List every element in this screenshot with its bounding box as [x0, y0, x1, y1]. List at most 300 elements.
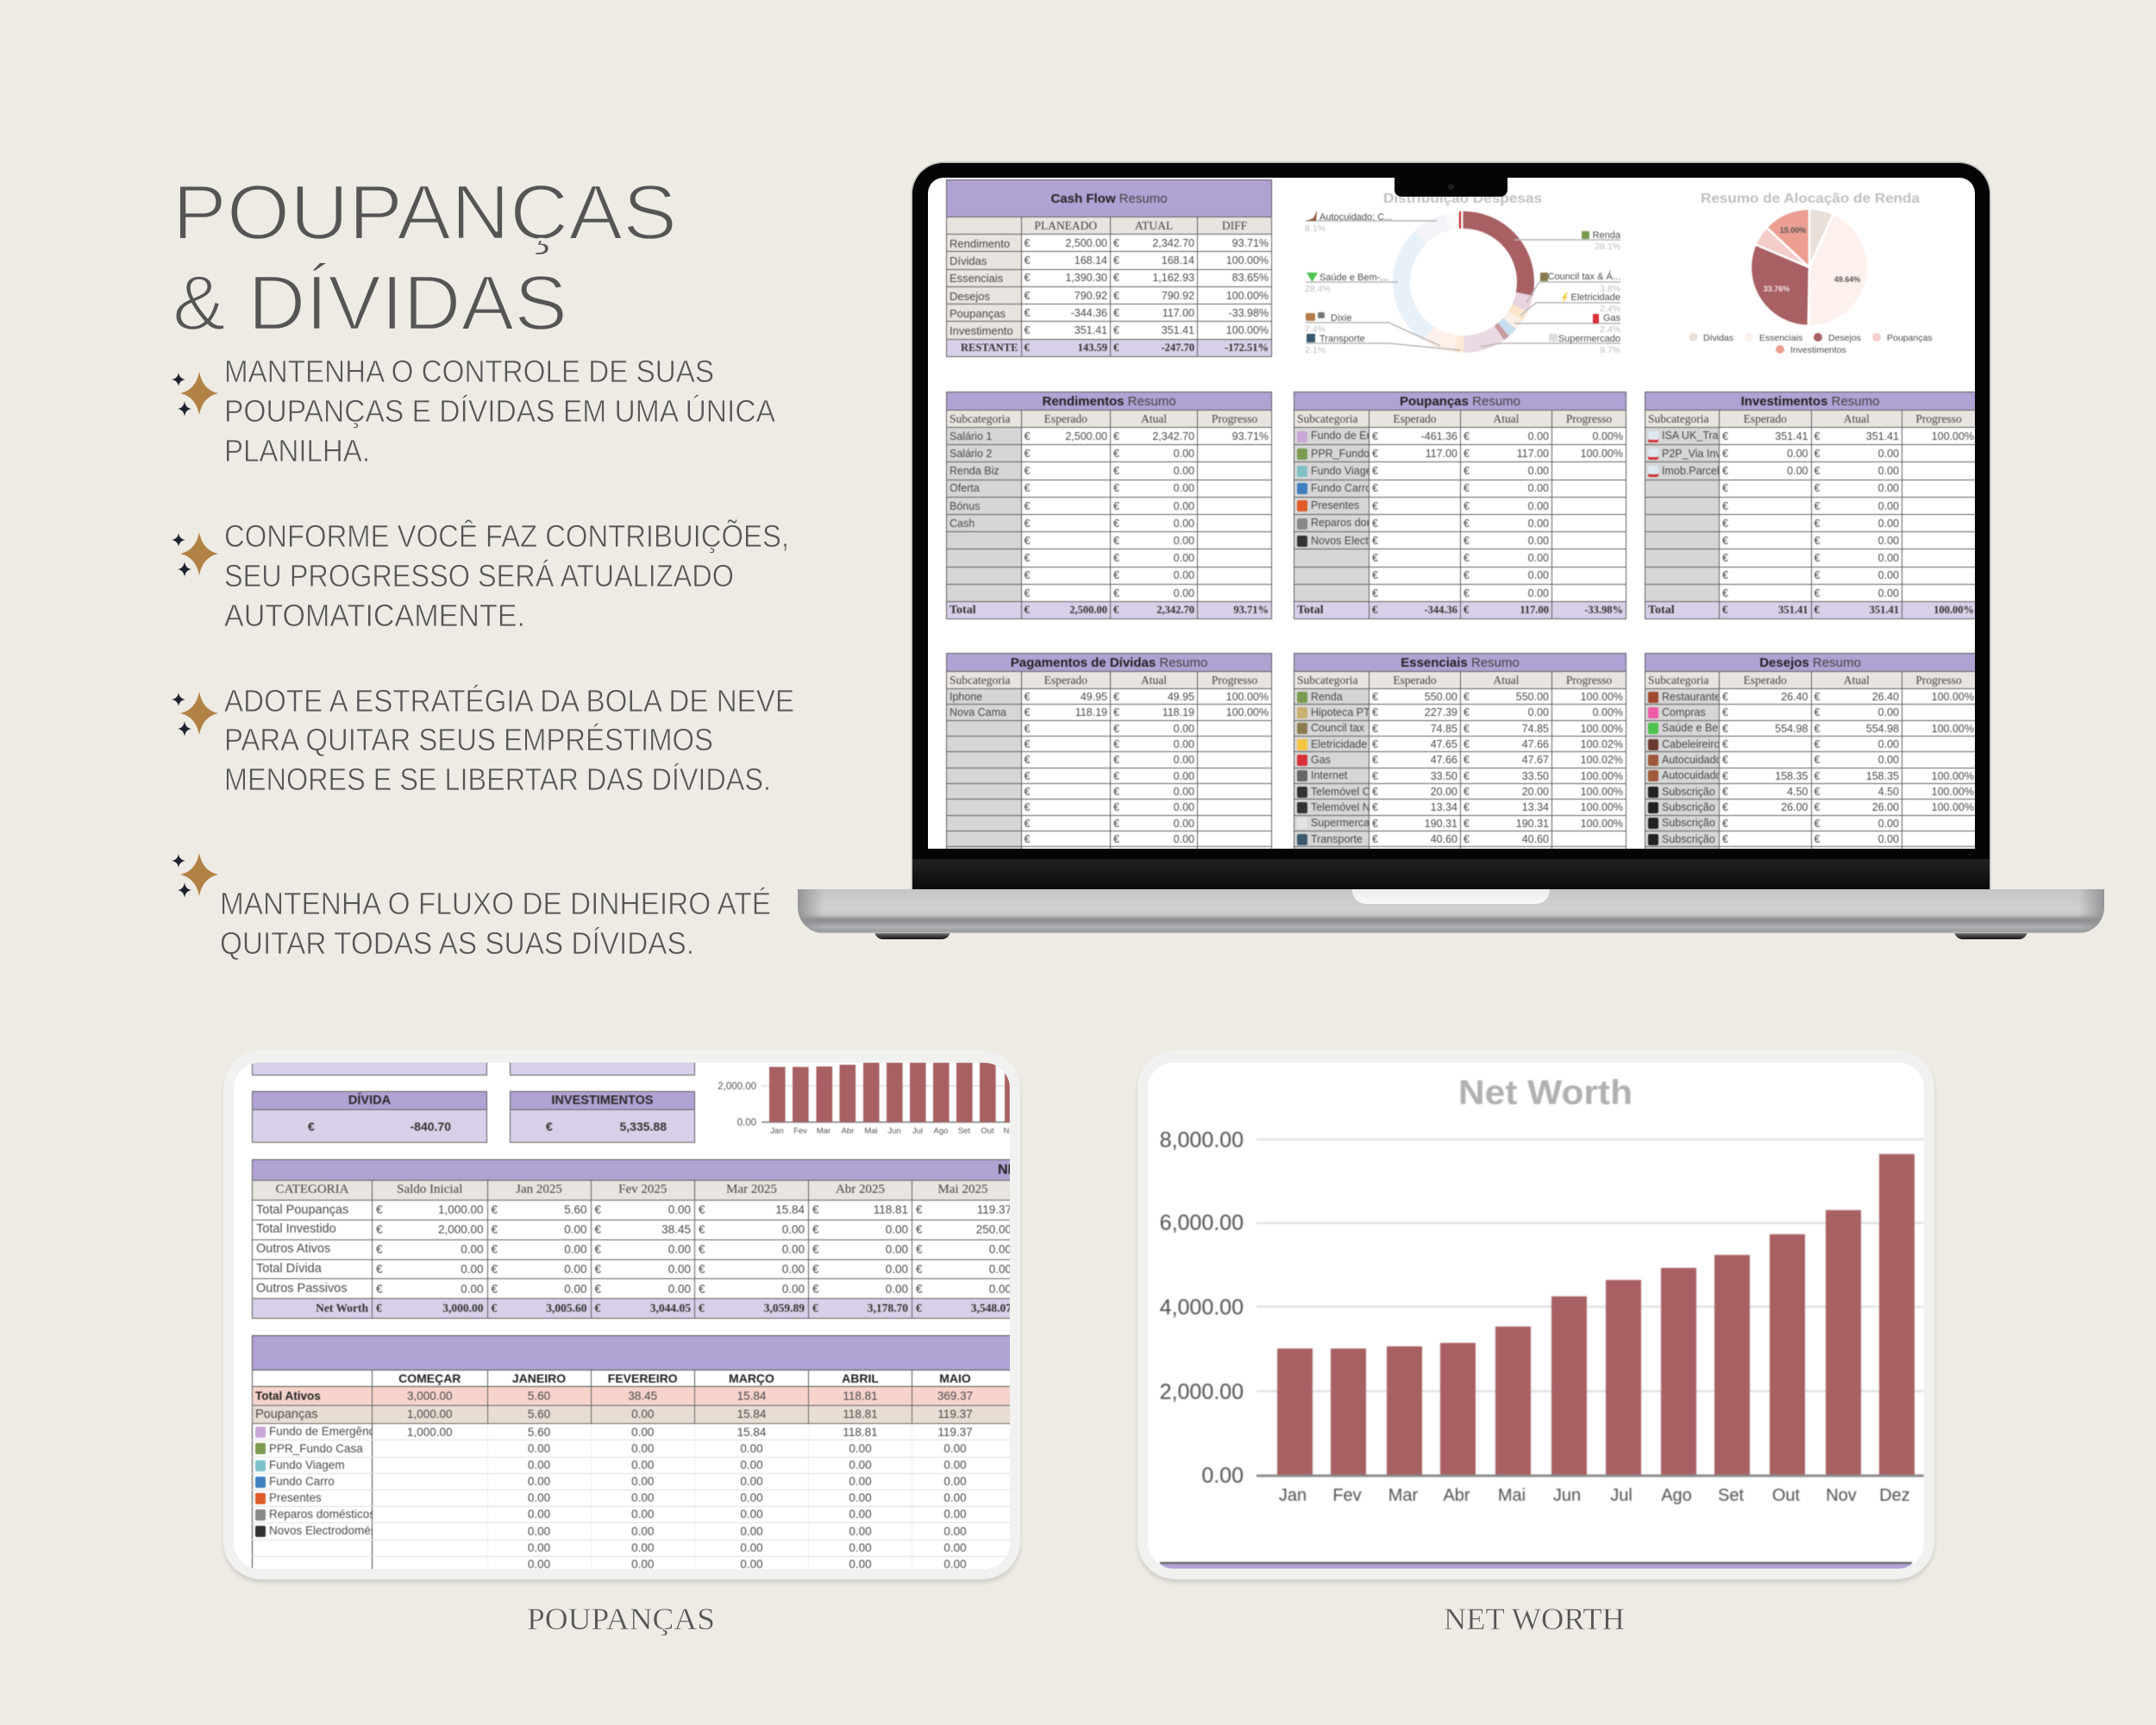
- heading: Poupanças Resumo: 0.00: [1528, 569, 1549, 581]
- heading: Rendimentos Resumo: €: [1113, 482, 1119, 494]
- heading band: 0.00: [528, 1442, 550, 1455]
- heading: Essenciais Resumo: [1294, 654, 1626, 849]
- heading: Desejos Resumo: 100.00%: [1932, 691, 1974, 703]
- heading: Essenciais Resumo: Gas: [1311, 754, 1331, 766]
- heading: Rendimentos Resumo: €: [1025, 448, 1030, 460]
- heading: Investimentos Resumo: €: [1722, 587, 1728, 599]
- heading: Desejos Resumo: 0.00: [1878, 818, 1899, 830]
- heading: Desejos Resumo: €: [1814, 801, 1820, 813]
- heading: Investimentos Resumo: Total: [1648, 604, 1675, 617]
- heading: Essenciais Resumo: 100.02%: [1581, 754, 1623, 766]
- text block: bullet 2: SEU PROGRESSO SERÁ ATUALIZADO: [224, 558, 734, 593]
- heading: Essenciais Resumo: 13.34: [1431, 801, 1457, 813]
- heading: Rendimentos Resumo: Atual: [1141, 412, 1167, 424]
- heading: Rendimentos Resumo: €: [1113, 587, 1119, 599]
- heading: Rendimentos Resumo: €: [1113, 535, 1119, 547]
- heading band: [252, 1335, 1028, 1572]
- heading: Pagamentos de Dívidas Resumo: €: [1113, 706, 1119, 718]
- heading: Net Worth: 5.60: [564, 1203, 586, 1216]
- heading: Net Worth: €: [595, 1223, 601, 1236]
- heading: Net Worth: Mai 2025: [938, 1182, 987, 1196]
- heading: Pagamentos de Dívidas Resumo: €: [1113, 833, 1119, 845]
- heading: Rendimentos Resumo: Subcategoria: [950, 412, 1010, 424]
- heading: Essenciais Resumo: Telemóvel N: [1311, 801, 1369, 813]
- heading: Essenciais Resumo: €: [1463, 754, 1470, 766]
- heading: Net Worth: €: [699, 1302, 705, 1314]
- heading band: 0.00: [528, 1475, 550, 1488]
- summary box: Investimentos: €: [546, 1120, 553, 1133]
- heading: Essenciais Resumo: 100.00%: [1581, 818, 1623, 830]
- heading: Essenciais Resumo: 20.00: [1431, 786, 1457, 798]
- laptop notch: [1395, 178, 1507, 197]
- heading: Investimentos Resumo: 0.00: [1878, 482, 1899, 494]
- table: Investimentos summary: [1644, 391, 1975, 620]
- heading band: 119.37: [937, 1426, 973, 1439]
- chart: Distribuição Despesas donut: Distribuição Despesas: [1383, 191, 1542, 206]
- heading: Poupanças Resumo: Poupanças Resumo: [1400, 393, 1520, 409]
- heading: Cash Flow Resumo: €: [1025, 254, 1030, 267]
- heading: Net Worth: €: [595, 1243, 601, 1256]
- heading: Rendimentos Resumo: €: [1025, 465, 1030, 477]
- heading: Investimentos Resumo: 0.00: [1787, 448, 1808, 460]
- summary box: Investimentos: INVESTIMENTOS: [551, 1094, 654, 1107]
- text block: bullet 2: AUTOMATICAMENTE.: [224, 598, 525, 633]
- heading: Desejos Resumo: €: [1722, 706, 1728, 718]
- heading: Investimentos Resumo: €: [1722, 604, 1727, 616]
- heading: Essenciais Resumo: 47.66: [1431, 754, 1457, 766]
- table: Essenciais summary: [1293, 652, 1627, 849]
- heading: Desejos Resumo: €: [1722, 818, 1728, 830]
- table: Desejos summary: [1644, 652, 1975, 849]
- heading band: 0.00: [631, 1541, 654, 1554]
- chart: cropped net worth bars: 0.00: [737, 1118, 756, 1128]
- heading: Essenciais Resumo: €: [1372, 833, 1378, 845]
- heading: Rendimentos Resumo: 0.00: [1174, 535, 1194, 547]
- heading: Investimentos Resumo: 0.00: [1878, 535, 1899, 547]
- heading: Pagamentos de Dívidas Resumo: 0.00: [1174, 801, 1194, 813]
- heading band: MARÇO: [729, 1371, 774, 1385]
- heading: Investimentos Resumo: 100.00%: [1934, 604, 1974, 616]
- heading: Essenciais Resumo: €: [1463, 818, 1470, 830]
- heading: Desejos Resumo: €: [1814, 818, 1820, 830]
- heading: Cash Flow Resumo: Investimento: [950, 324, 1013, 337]
- heading: Net Worth: €: [492, 1263, 498, 1276]
- text block: bullet 1: POUPANÇAS E DÍVIDAS EM UMA ÚNICA: [224, 393, 775, 429]
- heading: Cash Flow Resumo: €: [1113, 324, 1119, 336]
- chart: Distribuição Despesas donut: 8.1%: [1305, 223, 1326, 234]
- heading: Cash Flow Resumo: Cash Flow Resumo: [1050, 191, 1168, 205]
- heading band: Presentes: [269, 1491, 322, 1504]
- heading: Net Worth: 0.00: [461, 1243, 483, 1256]
- heading: Net Worth: €: [916, 1283, 923, 1295]
- heading: Net Worth: Abr 2025: [836, 1182, 885, 1196]
- heading: Net Worth: Saldo Inicial: [397, 1182, 462, 1196]
- heading: Rendimentos Resumo: 0.00: [1174, 500, 1194, 512]
- chart: Net Worth bars: 6,000.00: [1160, 1211, 1244, 1235]
- heading: Essenciais Resumo: 0.00%: [1593, 706, 1623, 718]
- summary box: Dívida: -840.70: [411, 1120, 451, 1133]
- heading: Pagamentos de Dívidas Resumo: €: [1025, 723, 1030, 735]
- heading: Net Worth: [252, 1159, 1010, 1318]
- table: monthly savings: [251, 1334, 1010, 1569]
- heading: Rendimentos Resumo: €: [1025, 518, 1030, 530]
- heading: Essenciais Resumo: 100.00%: [1581, 723, 1623, 735]
- heading: Investimentos Resumo: €: [1814, 587, 1820, 599]
- heading: Pagamentos de Dívidas Resumo: €: [1113, 818, 1119, 830]
- heading: Poupanças Resumo: €: [1372, 482, 1378, 494]
- heading: Rendimentos Resumo: €: [1025, 430, 1030, 442]
- heading: Net Worth: €: [812, 1243, 819, 1256]
- heading: Pagamentos de Dívidas Resumo: €: [1113, 786, 1119, 798]
- heading: Cash Flow Resumo: 790.92: [1162, 290, 1194, 302]
- heading: Cash Flow Resumo: PLANEADO: [1034, 219, 1097, 231]
- laptop feet: [874, 933, 2027, 939]
- heading: Cash Flow Resumo: -247.70: [1161, 342, 1194, 354]
- heading: Investimentos Resumo: 351.41: [1866, 430, 1899, 442]
- heading: Investimentos Resumo: €: [1722, 518, 1728, 530]
- heading: Net Worth: €: [376, 1243, 383, 1256]
- heading: Cash Flow Resumo: Dívidas: [950, 254, 987, 267]
- heading: Net Worth: €: [699, 1243, 705, 1256]
- text block: bullet 1: PLANILHA.: [224, 433, 370, 468]
- heading: Rendimentos Resumo: 0.00: [1174, 518, 1194, 530]
- heading: Essenciais Resumo: 74.85: [1522, 723, 1549, 735]
- heading band: JANEIRO: [512, 1371, 566, 1385]
- heading: Essenciais Resumo: Essenciais Resumo: [1401, 656, 1520, 669]
- heading: Cash Flow Resumo: Rendimento: [950, 237, 1010, 250]
- heading: Desejos Resumo: Desejos Resumo: [1759, 656, 1861, 669]
- heading: Desejos Resumo: Subscrição: [1662, 833, 1715, 845]
- heading: Investimentos Resumo: €: [1814, 465, 1820, 477]
- heading band: 15.84: [737, 1389, 766, 1402]
- chart: Distribuição Despesas donut: Council tax & Á...: [1548, 271, 1620, 282]
- chart: Resumo de Alocação de Renda pie: Desejos: [1828, 333, 1861, 343]
- heading: Essenciais Resumo: Atual: [1494, 673, 1520, 687]
- heading: Desejos Resumo: 0.00: [1878, 706, 1899, 718]
- heading: Investimentos Resumo: 0.00: [1878, 465, 1899, 477]
- heading: Essenciais Resumo: 100.02%: [1581, 738, 1623, 750]
- heading: Cash Flow Resumo: Desejos: [950, 290, 990, 303]
- heading: Net Worth: Outros Passivos: [256, 1282, 348, 1295]
- heading: Rendimentos Resumo: Progresso: [1212, 412, 1257, 424]
- table: net worth by month: [251, 1158, 1010, 1320]
- heading: Investimentos Resumo: €: [1814, 500, 1820, 512]
- heading: Rendimentos Resumo: Renda Biz: [950, 465, 1000, 477]
- heading: Investimentos Resumo: 0.00: [1878, 518, 1899, 530]
- heading: Cash Flow Resumo: €: [1113, 290, 1119, 302]
- heading: Pagamentos de Dívidas Resumo: Pagamentos de Dívidas Resumo: [1011, 656, 1207, 669]
- heading: Pagamentos de Dívidas Resumo: 0.00: [1174, 770, 1194, 782]
- heading: Essenciais Resumo: Eletricidade: [1311, 738, 1367, 750]
- heading: Cash Flow Resumo: €: [1025, 237, 1030, 249]
- heading: Investimentos Resumo: Investimentos Resumo: [1741, 393, 1879, 409]
- heading: Rendimentos Resumo: Salário 1: [950, 430, 992, 442]
- heading: Desejos Resumo: Cabeleireiro: [1662, 738, 1720, 750]
- heading: Poupanças Resumo: €: [1372, 535, 1378, 547]
- heading: Essenciais Resumo: €: [1463, 801, 1470, 813]
- heading: Essenciais Resumo: €: [1372, 786, 1378, 798]
- chart: Resumo de Alocação de Renda pie: 49.64%: [1834, 275, 1860, 284]
- heading: Poupanças Resumo: €: [1463, 604, 1469, 616]
- heading: Poupanças Resumo: 0.00: [1528, 430, 1549, 442]
- heading: Rendimentos Resumo: €: [1025, 569, 1030, 581]
- heading: Essenciais Resumo: Esperado: [1393, 673, 1437, 687]
- heading: Essenciais Resumo: €: [1463, 786, 1470, 798]
- heading: Net Worth: €: [492, 1203, 498, 1216]
- trackpad notch: [1352, 889, 1550, 904]
- heading: Poupanças Resumo: €: [1372, 552, 1378, 564]
- heading: Cash Flow Resumo: 83.65%: [1232, 272, 1269, 284]
- heading: Investimentos Resumo: €: [1814, 552, 1820, 564]
- heading: Cash Flow Resumo: Poupanças: [950, 307, 1006, 320]
- heading: Desejos Resumo: €: [1814, 723, 1820, 735]
- heading: Poupanças Resumo: €: [1463, 448, 1470, 460]
- heading: Cash Flow Resumo: -172.51%: [1225, 342, 1269, 354]
- heading: Essenciais Resumo: Council tax: [1311, 722, 1364, 734]
- heading: Desejos Resumo: €: [1722, 738, 1728, 750]
- heading: Pagamentos de Dívidas Resumo: €: [1113, 754, 1119, 766]
- heading: Desejos Resumo: €: [1722, 691, 1728, 703]
- heading: Poupanças Resumo: -344.36: [1424, 604, 1457, 616]
- heading: Essenciais Resumo: 190.31: [1425, 818, 1457, 830]
- heading: Net Worth: 3,178.70: [868, 1302, 908, 1314]
- laptop base: [798, 889, 2104, 933]
- heading band: 15.84: [737, 1408, 766, 1421]
- heading band: 0.00: [943, 1491, 967, 1504]
- heading: Net Worth: €: [376, 1203, 383, 1216]
- heading: Desejos Resumo: 26.40: [1872, 691, 1899, 703]
- table: Poupanças summary: [1293, 391, 1627, 620]
- heading: Desejos Resumo: €: [1814, 691, 1820, 703]
- heading: Cash Flow Resumo: ATUAL: [1135, 219, 1173, 231]
- chart: Net Worth bars: 4,000.00: [1160, 1295, 1244, 1320]
- heading: Poupanças Resumo: €: [1372, 569, 1378, 581]
- heading: Poupanças Resumo: [1294, 392, 1626, 619]
- heading: Cash Flow Resumo: €: [1113, 237, 1119, 249]
- heading band: Reparos domésticos: [269, 1508, 373, 1521]
- chart: cropped net worth bars: Abr: [842, 1126, 854, 1136]
- heading: Cash Flow Resumo: 2,342.70: [1152, 237, 1194, 249]
- heading: Pagamentos de Dívidas Resumo: 0.00: [1174, 754, 1194, 766]
- heading: Essenciais Resumo: 100.00%: [1581, 770, 1623, 782]
- heading: Essenciais Resumo: Telemóvel C: [1311, 786, 1369, 798]
- heading: Pagamentos de Dívidas Resumo: 100.00%: [1226, 691, 1269, 703]
- heading: Essenciais Resumo: €: [1463, 723, 1470, 735]
- heading: Desejos Resumo: €: [1722, 770, 1728, 782]
- heading: Desejos Resumo: Subcategoria: [1648, 673, 1708, 687]
- chart: Distribuição Despesas donut: 28.1%: [1595, 242, 1620, 252]
- heading: Net Worth: Total Poupanças: [256, 1203, 348, 1217]
- heading: Net Worth: 1,000.00: [438, 1203, 483, 1216]
- heading: Cash Flow Resumo: 100.00%: [1226, 290, 1269, 302]
- heading band: MAIO: [939, 1371, 971, 1385]
- heading: Poupanças Resumo: Subcategoria: [1297, 412, 1357, 424]
- heading: Pagamentos de Dívidas Resumo: €: [1025, 833, 1030, 845]
- heading: Net Worth: Outros Ativos: [256, 1242, 330, 1256]
- chart: Distribuição Despesas donut: Renda: [1593, 230, 1621, 241]
- text block: bullet 1: [224, 354, 775, 468]
- heading: Pagamentos de Dívidas Resumo: 0.00: [1174, 723, 1194, 735]
- heading: Investimentos Resumo: 0.00: [1878, 500, 1899, 512]
- heading: Essenciais Resumo: €: [1372, 770, 1378, 782]
- heading: Net Worth: €: [699, 1223, 705, 1236]
- chart: Distribuição Despesas donut: Supermercado: [1558, 334, 1620, 344]
- heading: Rendimentos Resumo: €: [1025, 587, 1030, 599]
- heading band: 0.00: [849, 1541, 872, 1554]
- heading: Cash Flow Resumo: DIFF: [1222, 219, 1247, 231]
- heading: Investimentos Resumo: €: [1722, 569, 1728, 581]
- heading band: 15.84: [737, 1426, 766, 1439]
- chart: cropped net worth bars: Fev: [793, 1126, 807, 1136]
- heading: Desejos Resumo: €: [1722, 833, 1728, 845]
- heading: Essenciais Resumo: Subcategoria: [1297, 673, 1357, 687]
- heading: Investimentos Resumo: €: [1814, 518, 1820, 530]
- chart: Distribuição Despesas donut: Autocuidado: C...: [1319, 212, 1392, 223]
- heading: Rendimentos Resumo: €: [1113, 569, 1119, 581]
- heading: Poupanças Resumo: -33.98%: [1584, 604, 1623, 616]
- heading: Essenciais Resumo: 0.00: [1528, 706, 1549, 718]
- heading: Poupanças Resumo: 0.00: [1528, 500, 1549, 512]
- heading band: 118.81: [843, 1426, 878, 1439]
- heading: Poupanças Resumo: €: [1463, 482, 1470, 494]
- heading: Desejos Resumo: 26.00: [1872, 801, 1899, 813]
- heading band: 0.00: [740, 1442, 763, 1455]
- heading: Poupanças Resumo: 0.00: [1528, 482, 1549, 494]
- chart: cropped net worth bars: Jul: [912, 1126, 923, 1136]
- heading: Poupanças Resumo: 0.00: [1528, 535, 1549, 547]
- heading: Essenciais Resumo: €: [1372, 691, 1378, 703]
- heading: Investimentos Resumo: 0.00: [1787, 465, 1808, 477]
- chart: Resumo de Alocação de Renda pie: 15.00%: [1780, 226, 1806, 235]
- heading: Net Worth: 2,000.00: [438, 1223, 483, 1236]
- heading: Net Worth: 3,044.05: [650, 1302, 691, 1314]
- heading: Poupanças Resumo: €: [1463, 465, 1470, 477]
- heading band: 0.00: [849, 1525, 872, 1538]
- heading: Cash Flow Resumo: €: [1025, 290, 1030, 302]
- heading: Pagamentos de Dívidas Resumo: €: [1025, 770, 1030, 782]
- heading: Net Worth: €: [376, 1223, 383, 1236]
- heading band: 0.00: [631, 1475, 654, 1488]
- heading: Investimentos Resumo: [1645, 392, 1975, 619]
- heading: Poupanças Resumo: Atual: [1494, 412, 1520, 424]
- heading: Essenciais Resumo: 100.00%: [1581, 691, 1623, 703]
- heading: Desejos Resumo: 554.98: [1866, 723, 1899, 735]
- heading: Rendimentos Resumo: 0.00: [1174, 482, 1194, 494]
- heading: Poupanças Resumo: €: [1372, 587, 1378, 599]
- chart: Net Worth bars: 0.00: [1201, 1464, 1244, 1488]
- heading: Poupanças Resumo: €: [1463, 569, 1470, 581]
- icon: sparkles bullet 2: [172, 532, 218, 577]
- heading: Desejos Resumo: Progresso: [1915, 673, 1962, 687]
- heading: Net Worth: €: [916, 1263, 923, 1276]
- chart: Net Worth bars: Jul: [1610, 1486, 1633, 1505]
- laptop: [798, 162, 2104, 939]
- heading: Cash Flow Resumo: €: [1025, 307, 1030, 319]
- heading: Cash Flow Resumo: 351.41: [1162, 324, 1194, 336]
- heading band: 118.81: [843, 1389, 878, 1402]
- heading band: FEVEREIRO: [608, 1371, 678, 1385]
- heading: Net Worth: €: [492, 1223, 498, 1236]
- heading band: 0.00: [740, 1475, 763, 1488]
- heading: Essenciais Resumo: €: [1463, 691, 1470, 703]
- heading: Rendimentos Resumo: Total: [950, 604, 976, 617]
- heading: Desejos Resumo: 0.00: [1878, 754, 1899, 766]
- heading: Net Worth: 0.00: [886, 1263, 908, 1276]
- text block: bullet 4: QUITAR TODAS AS SUAS DÍVIDAS.: [220, 925, 694, 961]
- caption: Poupanças: POUPANÇAS: [527, 1602, 715, 1636]
- heading: Net Worth: 0.00: [782, 1263, 805, 1276]
- heading: Essenciais Resumo: €: [1372, 723, 1378, 735]
- heading band: 0.00: [528, 1508, 550, 1521]
- chart: cropped net worth bars: [718, 1063, 1010, 1136]
- heading band: Poupanças: [255, 1408, 318, 1421]
- heading: Poupanças Resumo: 117.00: [1517, 448, 1549, 460]
- text block: bullet 4: MANTENHA O FLUXO DE DINHEIRO ATÉ: [220, 886, 771, 921]
- heading band: 0.00: [631, 1442, 654, 1455]
- chart: Net Worth bars: Fev: [1332, 1486, 1362, 1505]
- heading: Desejos Resumo: €: [1814, 738, 1820, 750]
- chart: Net Worth bars: Jun: [1553, 1486, 1581, 1505]
- chart: Resumo de Alocação de Renda pie: Dívidas: [1703, 333, 1733, 343]
- heading: Essenciais Resumo: Progresso: [1566, 673, 1612, 687]
- heading: Cash Flow Resumo: 168.14: [1162, 254, 1194, 267]
- heading: Poupanças Resumo: €: [1372, 518, 1378, 530]
- heading: Pagamentos de Dívidas Resumo: 0.00: [1174, 786, 1194, 798]
- heading: Rendimentos Resumo: [947, 392, 1271, 619]
- heading: Desejos Resumo: Subscrição: [1662, 786, 1715, 798]
- title: [172, 170, 677, 345]
- heading band: 0.00: [943, 1442, 967, 1455]
- heading: Net Worth: €: [812, 1263, 819, 1276]
- chart: Distribuição Despesas donut: Dixie: [1331, 313, 1351, 323]
- heading band: Fundo Viagem: [269, 1458, 345, 1471]
- heading: Poupanças Resumo: 117.00: [1426, 448, 1457, 460]
- heading: Rendimentos Resumo: €: [1025, 500, 1030, 512]
- heading: Poupanças Resumo: €: [1463, 430, 1470, 442]
- heading: Desejos Resumo: Atual: [1844, 673, 1870, 687]
- heading: Net Worth: 0.00: [564, 1283, 586, 1295]
- heading: Net Worth: €: [812, 1223, 819, 1236]
- heading: Rendimentos Resumo: €: [1113, 552, 1119, 564]
- heading: Rendimentos Resumo: €: [1025, 604, 1030, 616]
- heading: Cash Flow Resumo: 351.41: [1075, 324, 1107, 336]
- chart: Distribuição Despesas donut: Saúde e Bem-...: [1319, 273, 1388, 283]
- heading band: 0.00: [631, 1508, 654, 1521]
- heading: Desejos Resumo: 0.00: [1878, 833, 1899, 845]
- chart: cropped net worth bars: Out: [981, 1126, 994, 1136]
- heading: Essenciais Resumo: 47.65: [1431, 738, 1457, 750]
- heading: Net Worth: 0.00: [461, 1283, 483, 1295]
- heading: Investimentos Resumo: Esperado: [1744, 412, 1787, 424]
- icon: sparkles bullet 3: [172, 692, 218, 737]
- heading band: 118.81: [843, 1408, 878, 1421]
- heading: Pagamentos de Dívidas Resumo: €: [1025, 818, 1030, 830]
- heading: Investimentos Resumo: €: [1722, 500, 1728, 512]
- heading: Poupanças Resumo: €: [1463, 518, 1470, 530]
- heading: Desejos Resumo: 26.40: [1781, 691, 1808, 703]
- heading: Essenciais Resumo: €: [1372, 738, 1378, 750]
- chart: cropped net worth bars: Ago: [934, 1126, 948, 1136]
- heading: Pagamentos de Dívidas Resumo: 100.00%: [1226, 706, 1269, 718]
- heading band: 0.00: [528, 1541, 550, 1554]
- heading band: 0.00: [631, 1408, 654, 1421]
- heading: Investimentos Resumo: 0.00: [1878, 448, 1899, 460]
- heading: Net Worth: 0.00: [461, 1263, 483, 1276]
- heading: Essenciais Resumo: 13.34: [1522, 801, 1549, 813]
- heading: Rendimentos Resumo: €: [1113, 518, 1119, 530]
- table: Rendimentos summary: [945, 391, 1273, 620]
- heading: Rendimentos Resumo: 93.71%: [1233, 604, 1269, 616]
